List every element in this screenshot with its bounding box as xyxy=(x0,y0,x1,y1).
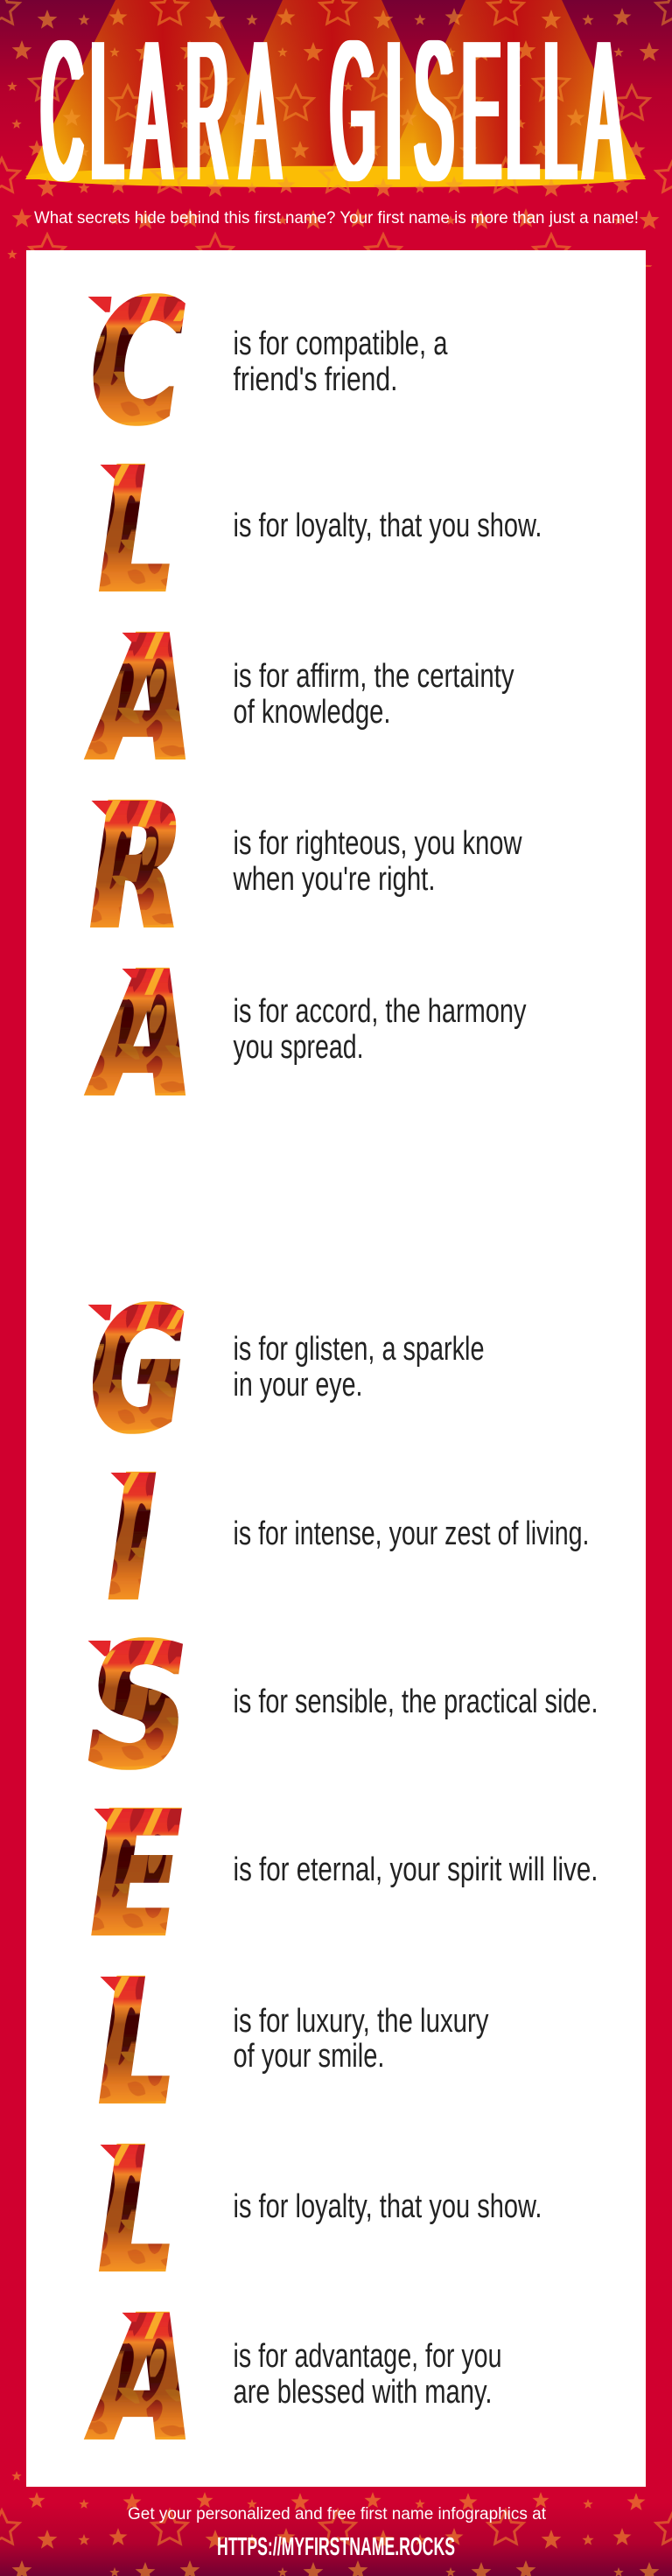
row: I xyxy=(94,1440,590,1639)
row: A xyxy=(81,2280,502,2479)
title: CLARA GISELLA xyxy=(41,0,623,222)
text C: is for compatible, a xyxy=(233,326,448,362)
text G: in your eye. xyxy=(233,1367,362,1404)
letter L: L xyxy=(86,2111,188,2310)
text R: is for righteous, you know xyxy=(233,825,522,862)
row: L xyxy=(86,431,542,630)
text L: of your smile. xyxy=(233,2038,385,2075)
text R xyxy=(233,825,522,898)
text A xyxy=(233,2338,502,2411)
spotlights xyxy=(25,0,646,187)
text A xyxy=(233,658,514,731)
text G xyxy=(233,1331,485,1404)
text L: is for loyalty, that you show. xyxy=(233,508,542,544)
row: A xyxy=(81,600,514,799)
row: C xyxy=(77,264,448,463)
letter A: A xyxy=(81,936,205,1135)
letter I: I xyxy=(94,1440,168,1639)
letter G: G xyxy=(77,1273,198,1471)
text A: of knowledge. xyxy=(233,694,390,731)
row: R xyxy=(77,767,522,966)
text A: is for accord, the harmony xyxy=(233,993,527,1030)
star pattern: header xyxy=(0,0,672,267)
text A: are blessed with many. xyxy=(233,2374,492,2411)
text A xyxy=(233,993,527,1066)
text C: friend's friend. xyxy=(233,361,397,398)
letter L: L xyxy=(86,431,188,630)
row: G xyxy=(77,1273,485,1471)
row: L xyxy=(86,1943,489,2142)
text L: is for luxury, the luxury xyxy=(233,2003,488,2040)
letter A: A xyxy=(81,600,205,799)
letter R: R xyxy=(77,767,194,966)
letter L: L xyxy=(86,1943,188,2142)
footer line: Get your personalized and free first name infographics at xyxy=(128,2505,547,2524)
text A: is for advantage, for you xyxy=(233,2338,502,2375)
text A: you spread. xyxy=(233,1029,364,1066)
text L: is for loyalty, that you show. xyxy=(233,2188,542,2225)
star pattern: footer xyxy=(0,2468,672,2576)
text L xyxy=(233,2003,488,2075)
row: E xyxy=(77,1776,598,1975)
subtitle: What secrets hide behind this first name? Your first name is more than just a name! xyxy=(34,209,639,228)
row: S xyxy=(74,1607,598,1806)
text G: is for glisten, a sparkle xyxy=(233,1331,485,1368)
row: L xyxy=(86,2111,542,2310)
text C xyxy=(233,326,448,398)
row: A xyxy=(81,936,527,1135)
letter C: C xyxy=(77,264,195,463)
letter S: S xyxy=(74,1607,201,1806)
letter A: A xyxy=(81,2280,205,2479)
text R: when you're right. xyxy=(233,861,436,898)
letter E: E xyxy=(77,1776,193,1975)
footer url: HTTPS://MYFIRSTNAME.ROCKS xyxy=(217,2533,455,2561)
text A: is for affirm, the certainty xyxy=(233,658,514,695)
